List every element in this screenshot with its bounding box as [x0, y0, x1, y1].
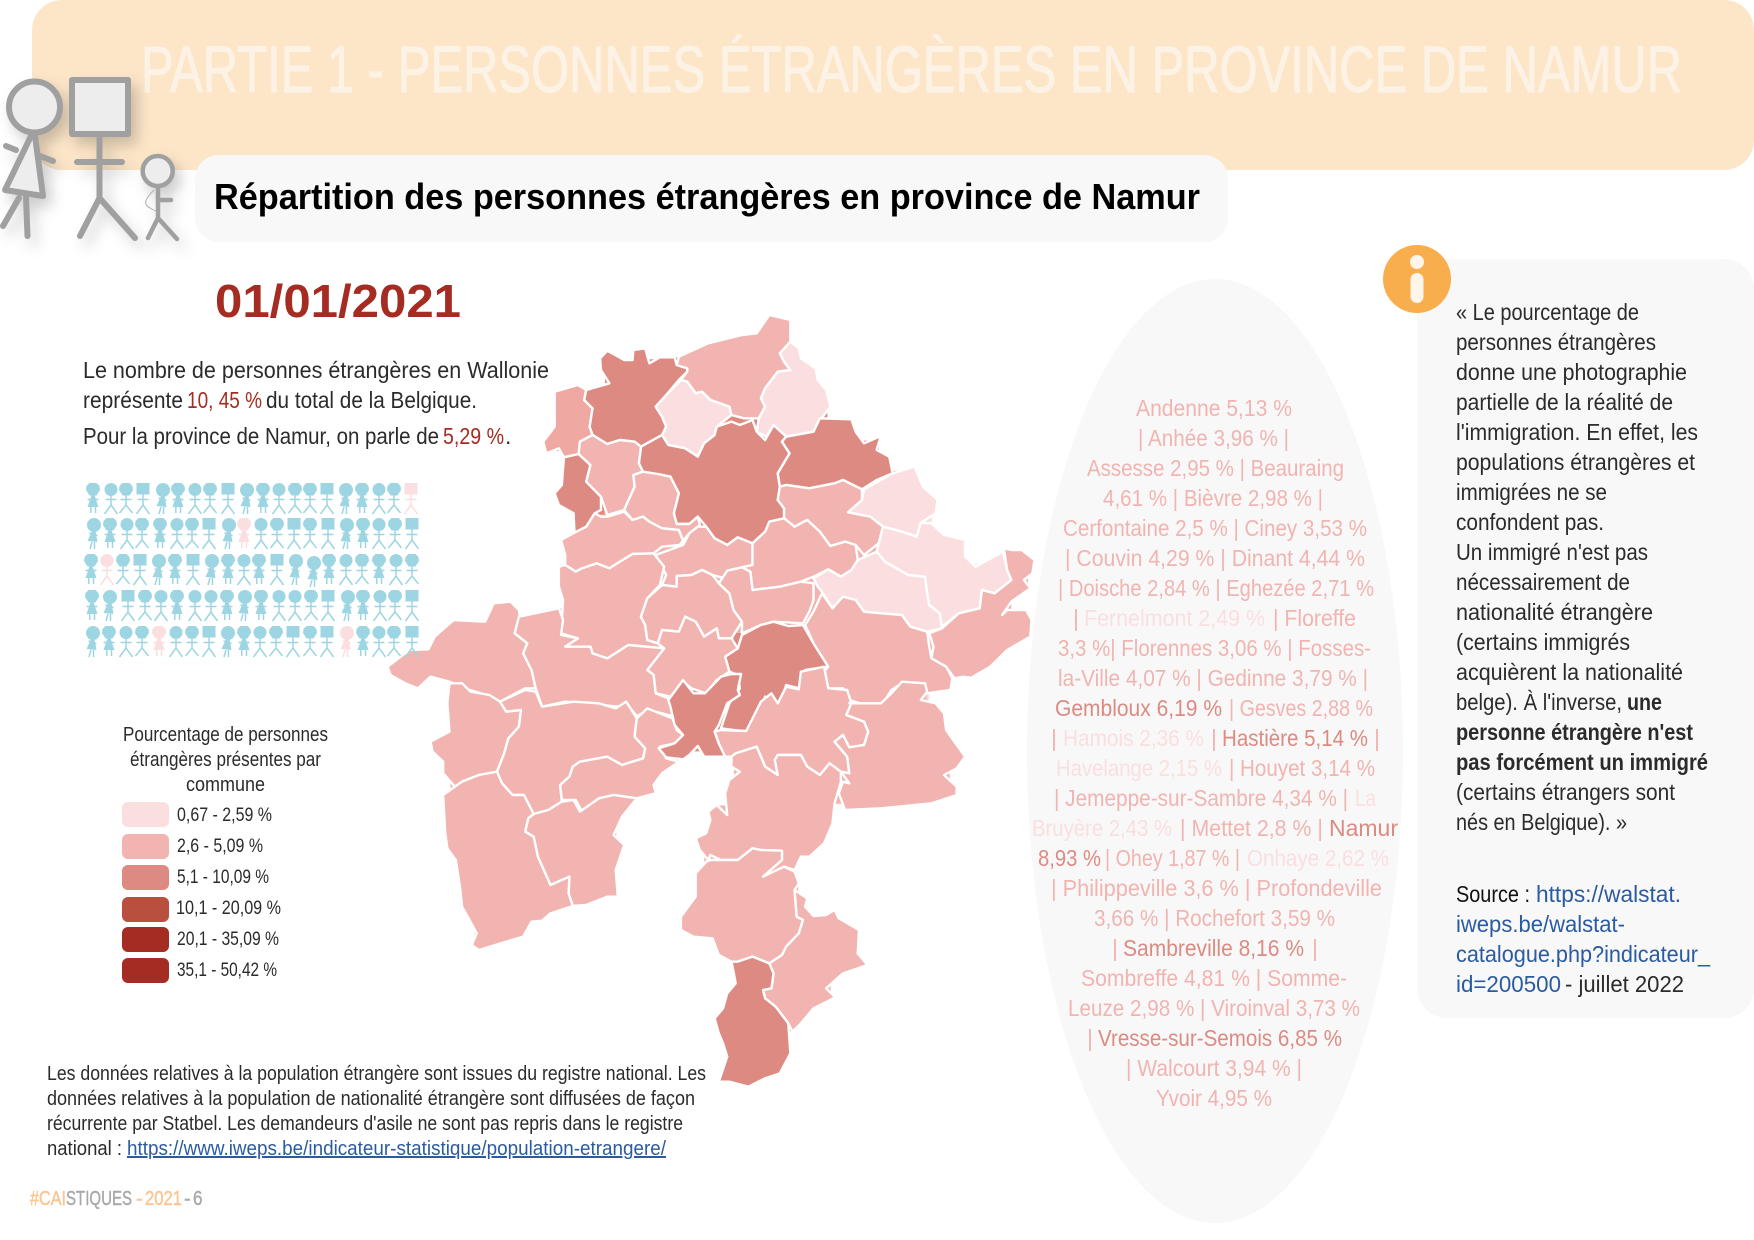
- source reference: iweps.be/walstat-: [1456, 911, 1625, 937]
- footnote on data sources: national :: [47, 1138, 122, 1160]
- choropleth map of communes: [388, 315, 1034, 1087]
- commune percentage list: la-Ville 4,07 % | Gedinne 3,79 % |: [1058, 665, 1368, 691]
- commune percentage list: Assesse 2,95 % | Beauraing: [1087, 455, 1344, 481]
- commune percentage list: | Mettet 2,8 % |: [1180, 815, 1323, 841]
- commune percentage list: |: [1312, 935, 1318, 961]
- pictogram row 4: [85, 590, 418, 621]
- commune percentage list: 3,3 %| Florennes 3,06 % | Fosses-: [1058, 635, 1371, 661]
- pictogram row 2: [87, 518, 418, 549]
- top banner: [32, 0, 1754, 170]
- source reference: id=200500: [1456, 971, 1561, 997]
- legend swatch 5: [122, 927, 279, 952]
- pictogram row 5: [86, 626, 418, 657]
- source reference: Source :: [1456, 881, 1530, 907]
- page footer: -: [136, 1188, 143, 1210]
- page footer: [30, 1188, 202, 1210]
- commune percentage list: Hastière 5,14 %: [1222, 725, 1368, 751]
- page footer: 6: [193, 1188, 202, 1210]
- footnote on data sources: Les données relatives à la population étrangère sont issues du registre national. Les: [47, 1063, 706, 1085]
- legend swatch 1: 0,67 - 2,59 %: [177, 805, 272, 826]
- commune percentage list: | Houyet 3,14 %: [1229, 755, 1375, 781]
- info quote text: Un immigré n'est pas: [1456, 539, 1648, 565]
- info quote text: populations étrangères et: [1456, 449, 1696, 475]
- legend swatch 4: 10,1 - 20,09 %: [176, 898, 281, 919]
- legend title: Pourcentage de personnes: [123, 724, 328, 746]
- info quote text: acquièrent la nationalité: [1456, 659, 1683, 685]
- commune percentage list: |: [1087, 1025, 1093, 1051]
- commune percentage list: | Anhée 3,96 % |: [1138, 425, 1289, 451]
- page footer: 2021: [145, 1188, 182, 1210]
- subtitle pill: [195, 155, 1228, 242]
- intro text: représente: [83, 387, 183, 413]
- info quote text: partielle de la réalité de: [1456, 389, 1673, 415]
- legend title: commune: [186, 774, 265, 796]
- source reference: https://walstat.: [1536, 881, 1681, 907]
- commune percentage list: Sombreffe 4,81 % | Somme-: [1081, 965, 1347, 991]
- info quote text: nés en Belgique). »: [1456, 809, 1627, 835]
- page footer: #CAI: [30, 1188, 66, 1210]
- legend swatch 5: 20,1 - 35,09 %: [177, 929, 279, 950]
- commune percentage list: [1032, 395, 1398, 1111]
- page footer: -: [184, 1188, 191, 1210]
- commune percentage list: Onhaye 2,62 %: [1247, 845, 1389, 871]
- man figure: [72, 80, 135, 238]
- legend swatch 3: [122, 865, 269, 890]
- commune percentage list: | Philippeville 3,6 % | Profondeville: [1051, 875, 1382, 901]
- commune percentage list: |: [1374, 725, 1380, 751]
- commune percentage list: | Gesves 2,88 %: [1229, 695, 1373, 721]
- legend title: étrangères présentes par: [130, 749, 321, 771]
- legend swatch 6: [122, 958, 277, 983]
- intro text: [83, 357, 549, 449]
- info quote text: immigrées ne se: [1456, 479, 1607, 505]
- source reference: [1456, 881, 1711, 997]
- commune percentage list: |: [1051, 725, 1057, 751]
- commune percentage list: 4,61 % | Bièvre 2,98 % |: [1103, 485, 1323, 511]
- commune percentage list: Hamois 2,36 %: [1063, 725, 1204, 751]
- commune percentage list: 8,93 %: [1038, 845, 1101, 871]
- southern communes: [431, 667, 965, 1087]
- commune percentage list: Havelange 2,15 %: [1056, 755, 1222, 781]
- commune percentage list: | Doische 2,84 % | Eghezée 2,71 %: [1058, 575, 1374, 601]
- commune percentage list: Sambreville 8,16 %: [1123, 935, 1304, 961]
- ellipse of commune percentages: [1027, 279, 1403, 1223]
- legend swatch 2: [122, 834, 263, 859]
- legend swatch 6: 35,1 - 50,42 %: [177, 960, 277, 981]
- source reference: - juillet 2022: [1565, 971, 1684, 997]
- commune percentage list: | Walcourt 3,94 % |: [1126, 1055, 1302, 1081]
- commune percentage list: | Couvin 4,29 % | Dinant 4,44 %: [1065, 545, 1365, 571]
- commune percentage list: Yvoir 4,95 %: [1156, 1085, 1272, 1111]
- northern and central communes: [388, 315, 1034, 732]
- map legend: [122, 724, 328, 983]
- icon: info: [1383, 245, 1451, 313]
- family stick figures illustration: [3, 80, 177, 239]
- info quote text: [1456, 299, 1708, 835]
- commune percentage list: | Floreffe: [1273, 605, 1356, 631]
- footnote on data sources: [47, 1063, 706, 1160]
- commune percentage list: Leuze 2,98 % | Viroinval 3,73 %: [1068, 995, 1360, 1021]
- commune percentage list: Gembloux 6,19 %: [1055, 695, 1222, 721]
- footnote on data sources: récurrente par Statbel. Les demandeurs d'asile ne sont pas repris dans le registre: [47, 1113, 683, 1135]
- info quote text: pas forcément un immigré: [1456, 749, 1708, 775]
- intro text: 5,29 %: [443, 423, 504, 449]
- commune percentage list: Namur: [1329, 815, 1398, 841]
- commune percentage list: |: [1112, 935, 1118, 961]
- commune percentage list: 3,66 % | Rochefort 3,59 %: [1094, 905, 1335, 931]
- info quote text: donne une photographie: [1456, 359, 1687, 385]
- intro text: Pour la province de Namur, on parle de: [83, 423, 439, 449]
- intro text: du total de la Belgique.: [266, 387, 477, 413]
- info quote text: nécessairement de: [1456, 569, 1630, 595]
- commune percentage list: | Ohey 1,87 % |: [1105, 845, 1240, 871]
- child figure: [143, 156, 177, 239]
- legend swatch 2: 2,6 - 5,09 %: [177, 836, 263, 857]
- intro text: Le nombre de personnes étrangères en Wallonie: [83, 357, 549, 383]
- pictogram row 1: [86, 483, 418, 514]
- info quote text: (certains étrangers sont: [1456, 779, 1676, 805]
- commune percentage list: Bruyère 2,43 %: [1032, 815, 1172, 841]
- commune percentage list: |: [1211, 725, 1217, 751]
- woman figure: [3, 82, 60, 236]
- commune percentage list: Andenne 5,13 %: [1136, 395, 1292, 421]
- info quote text: confondent pas.: [1456, 509, 1604, 535]
- info quote text: personne étrangère n'est: [1456, 719, 1693, 745]
- info quote text: personnes étrangères: [1456, 329, 1656, 355]
- page footer: STIQUES: [66, 1188, 132, 1210]
- commune percentage list: |: [1073, 605, 1079, 631]
- legend swatch 1: [122, 802, 272, 827]
- info panel: [1383, 245, 1754, 1018]
- legend title: [123, 724, 328, 796]
- intro text: 10, 45 %: [187, 387, 262, 413]
- legend swatch 3: 5,1 - 10,09 %: [177, 867, 269, 888]
- commune percentage list: La: [1355, 785, 1376, 811]
- info quote text: nationalité étrangère: [1456, 599, 1653, 625]
- commune percentage list: Vresse-sur-Semois 6,85 %: [1098, 1025, 1342, 1051]
- info quote text: l'immigration. En effet, les: [1456, 419, 1698, 445]
- legend swatch 4: [122, 897, 281, 922]
- info quote text: « Le pourcentage de: [1456, 299, 1639, 325]
- date heading: 01/01/2021: [215, 275, 461, 327]
- commune percentage list: Fernelmont 2,49 %: [1084, 605, 1265, 631]
- source reference: catalogue.php?indicateur_: [1456, 941, 1711, 967]
- footnote on data sources: données relatives à la population de nationalité étrangère sont diffusées de façon: [47, 1088, 695, 1110]
- info quote text: une: [1627, 689, 1662, 715]
- commune percentage list: Cerfontaine 2,5 % | Ciney 3,53 %: [1063, 515, 1367, 541]
- pictogram row 3: [84, 554, 419, 587]
- info quote text: belge). À l'inverse,: [1456, 689, 1622, 715]
- commune percentage list: | Jemeppe-sur-Sambre 4,34 % |: [1054, 785, 1348, 811]
- footnote on data sources: https://www.iweps.be/indicateur-statistique/population-etrangere/: [127, 1138, 666, 1160]
- pictogram of 100 people: [84, 483, 419, 657]
- info quote text: (certains immigrés: [1456, 629, 1630, 655]
- intro text: .: [505, 423, 511, 449]
- subtitle text: Répartition des personnes étrangères en province de Namur: [214, 176, 1200, 217]
